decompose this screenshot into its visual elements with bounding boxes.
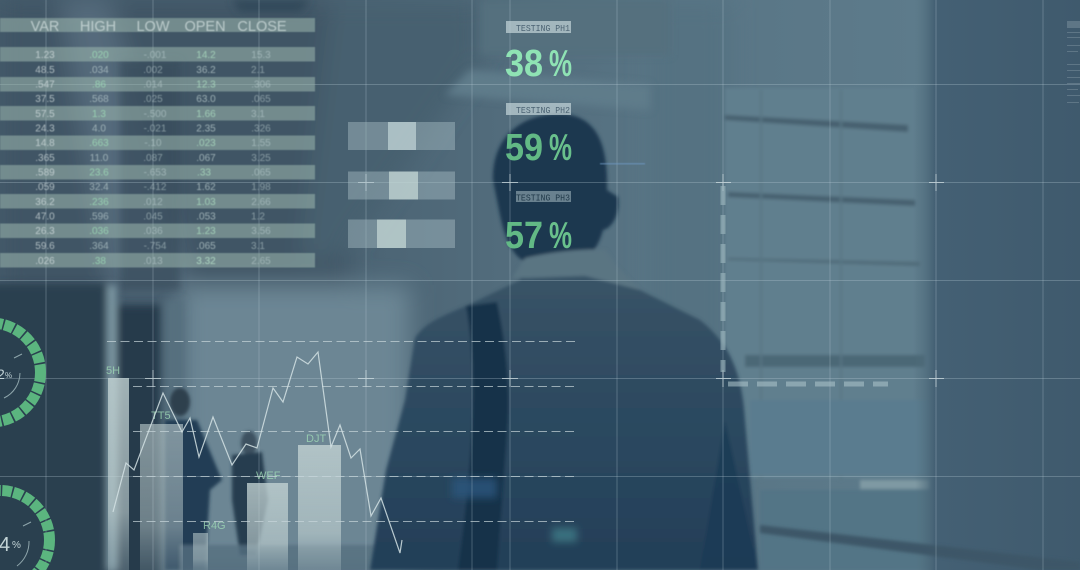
building windows — [725, 88, 930, 570]
testing stat 2 — [505, 103, 572, 169]
table column HIGH: 4.0 — [92, 124, 106, 134]
table column HIGH: .663 — [89, 138, 109, 149]
table column LOW: -.10 — [144, 138, 162, 149]
faint text block, top right — [1067, 21, 1080, 103]
bar DJT — [298, 433, 341, 570]
testing stat 1: % — [549, 43, 572, 84]
dashed horizontal marker — [728, 382, 888, 386]
testing stat 2: 59 — [505, 127, 543, 169]
table column VAR: 24.3 — [35, 124, 55, 134]
table column HIGH: 1.3 — [92, 109, 106, 120]
table column CLOSE: 2.66 — [251, 197, 271, 208]
right pillar — [915, 0, 1080, 570]
table column HIGH: .364 — [89, 241, 109, 252]
table column CLOSE: 3.25 — [251, 153, 271, 164]
table column HIGH — [89, 50, 109, 267]
table column VAR: 59.6 — [35, 241, 55, 252]
table column CLOSE — [251, 50, 271, 267]
gauge 2 — [0, 490, 50, 570]
table column OPEN: 12.3 — [196, 80, 216, 90]
bar TT5 — [140, 410, 183, 570]
table column OPEN: 3.32 — [196, 256, 216, 267]
table header: LOW — [136, 19, 170, 35]
table column OPEN: 1.03 — [196, 197, 216, 208]
table column LOW: -.001 — [144, 50, 167, 61]
bar WEF: WEF — [256, 470, 281, 482]
table column LOW: .025 — [143, 94, 163, 105]
table column OPEN: .33 — [197, 168, 211, 178]
table column CLOSE: .306 — [251, 80, 271, 90]
table column LOW: .012 — [143, 197, 163, 208]
table column VAR: 14.8 — [35, 138, 55, 149]
testing stat 3: % — [549, 215, 572, 256]
table column CLOSE: 2.1 — [251, 65, 265, 76]
slider 3 — [348, 220, 455, 248]
table column CLOSE: .065 — [251, 94, 271, 105]
testing stat 1: 38 — [505, 43, 543, 85]
table column VAR: .589 — [35, 168, 55, 178]
table column HIGH: .020 — [89, 50, 109, 61]
testing stat 1 — [505, 21, 572, 85]
table column VAR: .059 — [35, 182, 55, 193]
bar 5H — [106, 365, 129, 570]
table column OPEN: .053 — [196, 212, 216, 222]
icon: ceiling detail — [120, 0, 670, 290]
table column LOW: .087 — [143, 153, 163, 164]
table header — [31, 19, 287, 35]
testing stat 3: TESTING PH3 — [516, 192, 570, 204]
table column CLOSE: 15.3 — [251, 50, 271, 61]
table column CLOSE: 1.2 — [251, 212, 265, 222]
lens flare streak — [600, 163, 645, 164]
table column VAR: 37.5 — [35, 94, 55, 105]
table column LOW — [143, 50, 167, 267]
bar WEF — [247, 470, 288, 570]
table column CLOSE: 1.98 — [251, 182, 271, 193]
testing stat 1: TESTING PH1 — [516, 23, 570, 34]
table column OPEN: 1.66 — [196, 109, 216, 120]
table column CLOSE: 2.65 — [251, 256, 271, 267]
table column LOW: -.754 — [144, 241, 167, 252]
table column OPEN: .067 — [196, 153, 216, 164]
table column HIGH: .568 — [89, 94, 109, 105]
background people — [165, 388, 380, 570]
table column HIGH: .596 — [89, 212, 109, 222]
testing stat 2: TESTING PH2 — [516, 105, 570, 116]
table column HIGH: 11.0 — [90, 153, 109, 164]
table column OPEN: .023 — [196, 138, 216, 149]
table column OPEN: 63.0 — [196, 94, 216, 105]
table column OPEN: 1.23 — [196, 226, 216, 237]
table header: VAR — [31, 19, 59, 35]
table column CLOSE: .065 — [251, 168, 271, 178]
gauge 1: % — [5, 371, 12, 380]
table column CLOSE: 3.1 — [251, 241, 265, 252]
bar chart — [106, 365, 341, 570]
table column CLOSE: .326 — [251, 124, 271, 134]
slider bars — [348, 122, 455, 248]
crosshair markers — [145, 174, 944, 387]
table column LOW: -.500 — [144, 109, 167, 120]
table column VAR: 1.23 — [35, 50, 55, 61]
table column HIGH: 23.6 — [89, 168, 109, 178]
table column HIGH: .86 — [92, 80, 106, 90]
table column HIGH: .236 — [89, 197, 109, 208]
reflections — [452, 478, 577, 542]
table column CLOSE: 3.56 — [251, 226, 271, 237]
gauge 2: % — [12, 540, 21, 551]
bar R4G — [193, 520, 226, 570]
table header: HIGH — [80, 19, 116, 35]
table column OPEN: 2.35 — [196, 124, 216, 134]
table column OPEN — [196, 50, 216, 267]
table column VAR: .547 — [35, 80, 55, 90]
table column OPEN: .065 — [196, 241, 216, 252]
table column LOW: -.021 — [144, 124, 167, 134]
table column LOW: .045 — [143, 212, 163, 222]
table column VAR: 26.3 — [35, 226, 55, 237]
bar 5H: 5H — [106, 365, 120, 377]
table column VAR: 57.5 — [35, 109, 55, 120]
table column CLOSE: 1.55 — [251, 138, 271, 149]
table column VAR: 47.0 — [35, 212, 55, 222]
testing stat 3: 57 — [505, 215, 543, 257]
testing stat 2: % — [549, 127, 572, 168]
table column HIGH: 32.4 — [89, 182, 109, 193]
main figure: man seen from behind — [370, 114, 758, 570]
slider 2 — [348, 172, 455, 200]
table row bands — [0, 18, 315, 268]
left dark pillar — [0, 284, 183, 570]
table column HIGH: .38 — [92, 256, 106, 267]
table column LOW: .036 — [143, 226, 163, 237]
data table — [0, 18, 315, 268]
table column LOW: -.412 — [144, 182, 167, 193]
table column VAR: 36.2 — [35, 197, 55, 208]
table column LOW: -.653 — [144, 168, 167, 178]
bar R4G: R4G — [203, 520, 226, 532]
table column OPEN: 14.2 — [196, 50, 216, 61]
table column HIGH: .036 — [89, 226, 109, 237]
table column VAR: .026 — [35, 256, 55, 267]
table column HIGH: .034 — [89, 65, 109, 76]
railing — [760, 525, 1080, 570]
table header: CLOSE — [237, 19, 287, 35]
bar TT5: TT5 — [151, 410, 171, 422]
gauge 1 — [0, 323, 40, 422]
table column OPEN: 1.62 — [196, 182, 216, 193]
table column OPEN: 36.2 — [196, 65, 216, 76]
table column CLOSE: 3.1 — [251, 109, 265, 120]
table header: OPEN — [184, 19, 226, 35]
table column LOW: .013 — [143, 256, 163, 267]
table column VAR: 48.5 — [35, 65, 55, 76]
table column LOW: .014 — [143, 80, 163, 90]
dashed guide lines — [107, 342, 575, 522]
table column VAR — [35, 50, 55, 267]
testing stat 3 — [505, 191, 572, 257]
slider 1 — [348, 122, 455, 150]
table column LOW: .002 — [143, 65, 163, 76]
dashed vertical marker — [720, 186, 726, 372]
table column VAR: .365 — [35, 153, 55, 164]
line chart — [113, 352, 402, 553]
bar DJT: DJT — [306, 433, 326, 445]
